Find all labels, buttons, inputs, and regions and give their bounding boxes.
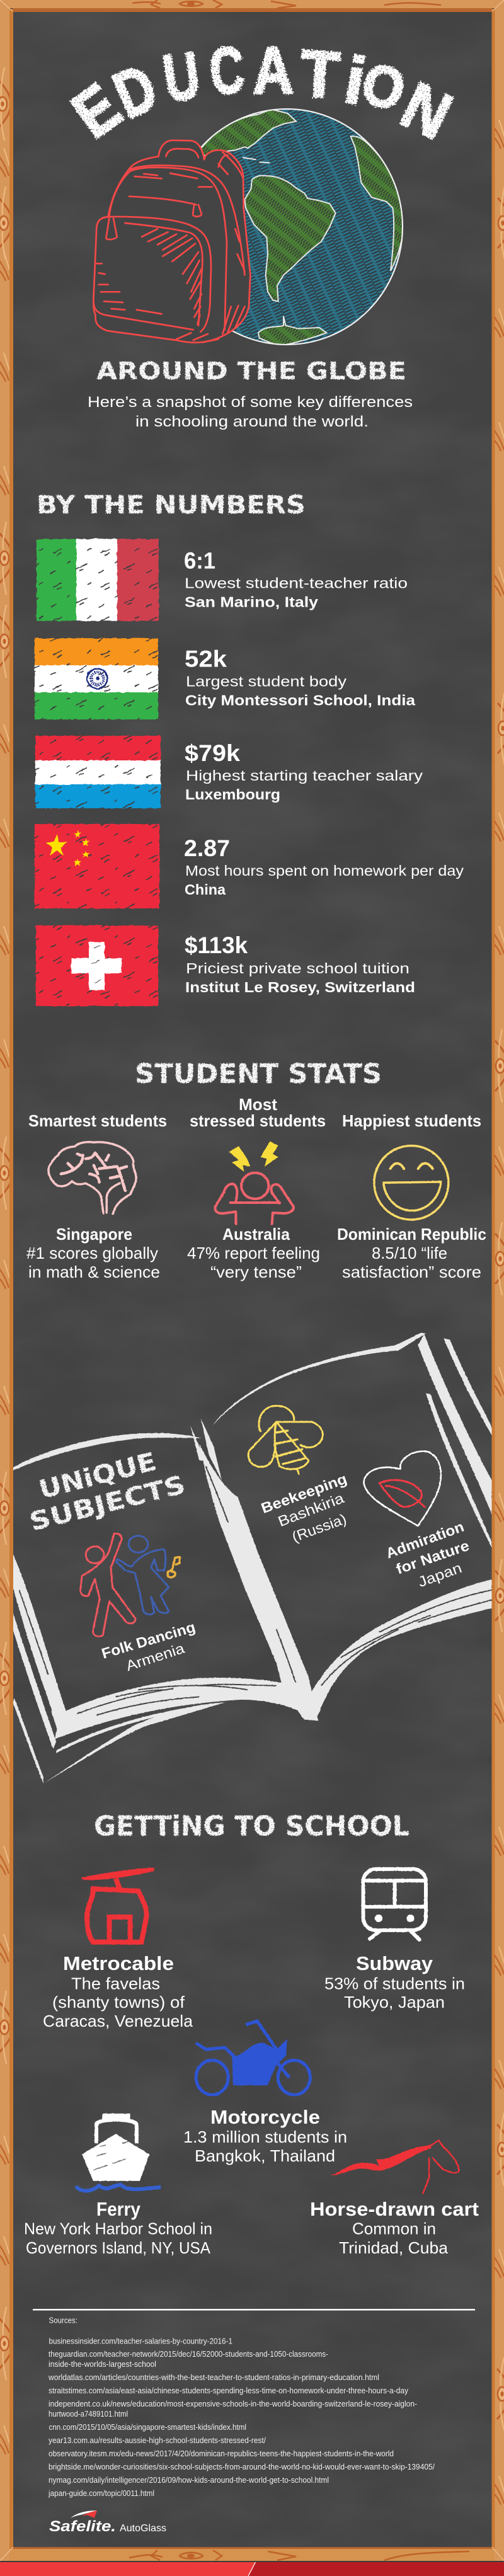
sources list [48,2316,435,2498]
transport: subway [324,1869,465,2012]
label [24,2198,212,2257]
stat text: China [185,881,226,898]
flag: Switzerland [36,925,158,1006]
subject label: Armenia [124,1640,186,1674]
open book illustration [13,1332,492,1783]
stat text [185,932,415,995]
subject label [384,1518,471,1590]
flag: China [35,824,159,908]
label: New York Harbor School in [24,2219,212,2238]
column text: satisfaction” score [342,1262,481,1281]
label: Motorcycle [210,2106,320,2128]
heading: Around the Globe: AROUND THE GLOBE [96,357,406,385]
sources list: brightside.me/wonder-curiosities/six-school-subjects-from-around-the-world-no-kid-would-ever-want-to-skip-139405/ [49,2462,435,2471]
icon: brain [49,1142,136,1214]
flag: India [35,638,158,719]
label: 1.3 million students in [183,2127,347,2146]
icon: backpack [93,140,250,343]
subject: admiration for nature [364,1451,471,1590]
subject: beekeeping [248,1406,349,1545]
column text: 8.5/10 “life [372,1244,447,1262]
icon: cable car [81,1867,154,1942]
stat text [184,835,464,898]
icon: globe [200,108,403,345]
sources list: year13.com.au/results-aussie-high-school-students-stressed-rest/ [49,2436,266,2445]
stat text: 2.87 [184,835,230,861]
icon: train [364,1869,426,1940]
column text: “very tense” [210,1262,302,1281]
sources list: observatory.itesm.mx/edu-news/2017/4/20/dominican-republics-teens-the-happiest-students-in-the-world [49,2449,394,2458]
sources list: independent.co.uk/news/education/most-expensive-schools-in-the-world-boarding-switzerland-le-rosey-aiglon- [49,2399,417,2408]
subject label: Japan [416,1559,464,1590]
title: Education: E [59,69,134,152]
stat column: happiest students [337,1111,486,1281]
heading: Unique Subjects: UNiQUE [36,1447,159,1505]
title: Education: U [159,38,204,116]
subject label: Bashkiria [275,1489,346,1530]
stat text: City Montessori School, India [185,692,415,708]
stat column: most stressed students [187,1095,326,1281]
intro text: in schooling around the world. [135,413,369,430]
row: China [35,824,464,908]
heading: Student Stats: STUDENT STATS [135,1058,382,1090]
sources list: hurtwood-a7489101.html [49,2409,128,2419]
title: Education: i [340,43,370,119]
transport: motorcycle [183,2021,347,2165]
stat text: Luxembourg [185,786,280,803]
transport: metrocable [43,1867,193,2030]
stat column: smartest students [26,1111,167,1281]
hero illustration: globe and backpack [93,109,403,345]
subject label: for Nature [394,1537,471,1577]
title: Education: N [391,68,462,154]
label: Common in [352,2219,436,2238]
icon: motorcycle [196,2021,310,2095]
column text: in math & science [28,1262,160,1281]
Safelite AutoGlass logo [49,2510,166,2535]
column text: Singapore [56,1225,132,1244]
stat text: Highest starting teacher salary [186,767,423,784]
label: Horse-drawn cart [310,2198,479,2220]
column text: Australia [222,1225,290,1244]
stat text [184,548,408,610]
column text [187,1225,320,1281]
intro text [88,394,413,430]
label: (shanty towns) of [52,1993,185,2012]
heading: By the Numbers: BY THE NUMBERS [37,491,306,520]
stat text: $79k [185,740,240,766]
label: Bangkok, Thailand [195,2146,335,2165]
stat text: 52k [185,646,227,672]
transport: horse-drawn cart [310,2140,479,2257]
label: 53% of students in [324,1974,465,1993]
label: Subway [356,1952,433,1974]
icon: laughing face [374,1146,449,1220]
title: Education: D [103,50,168,133]
bottom red bar [0,2561,504,2576]
icon: ferry boat [76,2114,161,2191]
sources list: straitstimes.com/asia/east-asia/chinese-students-spending-less-time-on-homework-under-three-hours-a-day [49,2386,408,2395]
label [43,1952,193,2030]
title: Education: T [298,37,342,113]
row: India [35,638,415,719]
column text: 47% report feeling [187,1244,320,1262]
Safelite AutoGlass logo: AutoGlass [120,2523,166,2534]
label: Metrocable [63,1952,174,1974]
label: Caracas, Venezuela [43,2012,193,2030]
sources list: nymag.com/daily/intelligencer/2016/09/how-kids-around-the-world-get-to-school.html [49,2475,329,2485]
label [183,2106,347,2165]
heading: Getting to School: GETTiNG TO SCHOOL [94,1811,410,1842]
heading: Unique Subjects [26,1447,188,1537]
intro text: Here’s a snapshot of some key differences [88,394,413,411]
icon: bee [248,1406,323,1474]
column heading: Most [239,1095,277,1114]
flag: Italy [37,539,159,621]
title: Education: C [207,33,247,109]
sources list: theguardian.com/teacher-network/2015/dec/16/52000-students-and-1050-classrooms- [49,2349,328,2359]
transport: ferry [24,2114,212,2257]
subject: folk dancing [81,1533,197,1674]
column text: #1 scores globally [26,1244,158,1262]
subject label: (Russia) [290,1510,348,1545]
stat text: Lowest student-teacher ratio [185,575,408,591]
stat text: Most hours spent on homework per day [185,862,464,879]
sources list: cnn.com/2015/10/05/asia/singapore-smartest-kids/index.html [49,2422,246,2432]
icon: heart and leaf [364,1451,441,1526]
stat text [185,740,423,803]
column heading [190,1095,326,1130]
stat text: Priciest private school tuition [186,960,410,976]
stat text: Largest student body [186,673,347,689]
row: San Marino, Italy [37,539,408,621]
title: Education: A [252,33,294,108]
title: Education [59,33,462,154]
subject label: Beekeeping [259,1470,349,1516]
label: Trinidad, Cuba [339,2238,449,2257]
stat text: 6:1 [184,548,215,573]
stat text: $113k [185,932,248,958]
heading: Unique Subjects: SUBJECTS [26,1470,188,1537]
icon: horse [330,2140,459,2194]
icon: stressed person [215,1142,294,1224]
subject label [259,1470,349,1545]
icon: dancers [81,1533,180,1636]
sources divider [33,2309,475,2311]
column heading: stressed students [190,1111,326,1130]
row: Luxembourg [35,736,423,808]
sources list: japan-guide.com/topic/0011.html [48,2488,154,2498]
Safelite AutoGlass logo: Safelite. [49,2518,116,2535]
label: The favelas [71,1974,160,1993]
label [310,2198,479,2257]
subject label: Admiration [384,1518,466,1562]
subject label: Folk Dancing [100,1618,197,1662]
label: Ferry [96,2198,141,2220]
sources list: worldatlas.com/articles/countries-with-the-best-teacher-to-student-ratios-in-primary-education.html [48,2373,379,2382]
label: Tokyo, Japan [344,1993,445,2012]
column heading: Smartest students [28,1111,167,1130]
title: Education: O [355,50,412,123]
stat text: San Marino, Italy [185,593,318,610]
column text: Dominican Republic [337,1225,486,1244]
sources list: inside-the-worlds-largest-school [49,2359,156,2369]
stat text [185,646,415,708]
stat text: Institut Le Rosey, Switzerland [185,979,415,995]
row: Switzerland [36,925,415,1006]
sources list: businessinsider.com/teacher-salaries-by-country-2016-1 [49,2336,232,2346]
flag: Luxembourg [35,736,161,808]
column heading: Happiest students [342,1111,481,1130]
column text [26,1225,160,1281]
label [324,1952,465,2012]
label: Governors Island, NY, USA [26,2238,211,2257]
column text [337,1225,486,1281]
sources list: Sources: [49,2316,77,2325]
